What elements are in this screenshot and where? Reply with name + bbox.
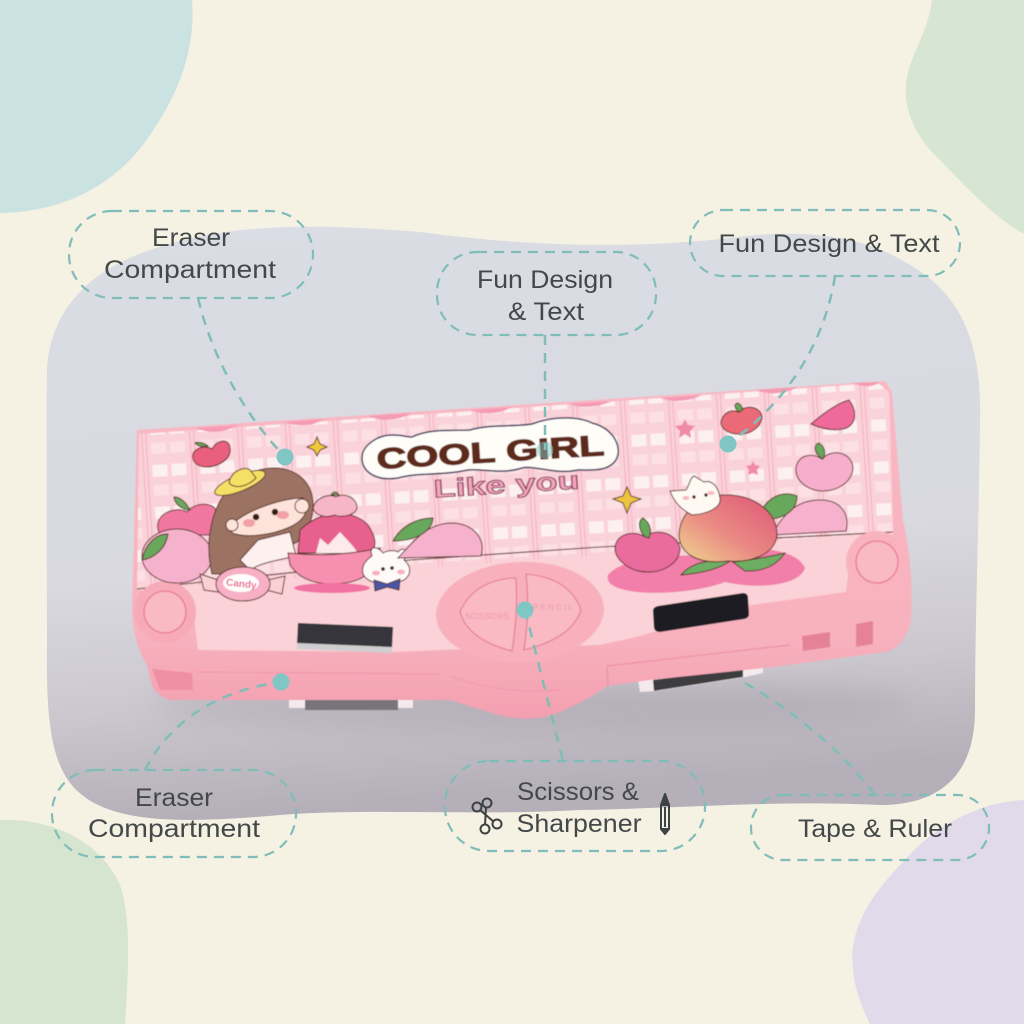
printed lower panel bbox=[137, 532, 893, 652]
right button label: PENCIL bbox=[533, 603, 574, 612]
sticker: big peach bbox=[679, 495, 777, 562]
scallops along top edge bbox=[195, 382, 880, 432]
left hinge slot bbox=[152, 669, 193, 690]
callout: eraser compartment top: Eraser bbox=[152, 224, 230, 252]
title badge bbox=[362, 418, 618, 479]
sticker: peach slice bbox=[811, 400, 855, 430]
left button: scissors bbox=[460, 578, 516, 651]
decorative blob: bottom left green bbox=[0, 820, 128, 1024]
callout: tape and ruler bbox=[751, 795, 989, 860]
sticker: apple right bbox=[796, 443, 853, 491]
tagline text: Like you bbox=[433, 467, 580, 503]
sticker: small apple top left bbox=[193, 441, 230, 467]
sticker: bunny bbox=[363, 548, 410, 591]
decorative blob: top right green bbox=[906, 0, 1024, 234]
lower right clip bbox=[638, 662, 763, 692]
sticker: left pink apple bbox=[158, 497, 216, 535]
sticker: girl bbox=[209, 465, 313, 574]
sticker: apple top right bbox=[721, 403, 762, 434]
sticker: yellow sparkle right bbox=[613, 487, 641, 513]
callout: fun design right bbox=[690, 210, 960, 276]
girl hat bbox=[212, 465, 268, 501]
sticker: sundae shadow bbox=[294, 583, 370, 593]
printed plaid panel bbox=[137, 383, 893, 590]
decorative blob: top left blue bbox=[0, 0, 193, 213]
lower drawer outline bbox=[607, 645, 790, 686]
callout dots bbox=[272, 436, 736, 690]
grey backdrop behind the product bbox=[47, 227, 980, 820]
icon: pencil bbox=[661, 794, 669, 834]
right button: pencil bbox=[524, 574, 581, 650]
pencil box product bbox=[132, 381, 912, 719]
right black clasp bbox=[653, 593, 749, 632]
left button label: SCISSORS bbox=[465, 612, 509, 621]
sticker: leaves under big peach bbox=[681, 553, 785, 575]
callout: scissors and sharpener: Scissors & bbox=[517, 778, 639, 806]
sticker: peach shadow bbox=[608, 549, 805, 593]
candy label: Candy bbox=[225, 577, 257, 592]
callout: eraser compartment bottom: Compartment bbox=[88, 815, 260, 843]
centre dial bbox=[433, 558, 607, 666]
sticker: cat bbox=[670, 476, 720, 515]
callout: fun design centre bbox=[437, 252, 656, 335]
lower left clip bbox=[289, 697, 413, 710]
sticker: sundae bbox=[288, 492, 380, 584]
box body bbox=[132, 381, 912, 719]
callout: eraser compartment bottom: Eraser bbox=[135, 784, 213, 812]
horizon line bbox=[137, 532, 893, 589]
sticker: back peach bbox=[762, 494, 847, 535]
callout: tape and ruler: Tape & Ruler bbox=[798, 815, 952, 843]
right round button bbox=[846, 531, 908, 593]
leader lines bbox=[145, 276, 875, 795]
callout: eraser compartment bottom bbox=[52, 770, 296, 857]
front seam bbox=[195, 672, 560, 691]
sticker: pink stars bbox=[675, 419, 760, 475]
decorative blob: bottom right lavender bbox=[852, 800, 1024, 1024]
sticker: middle peach bbox=[393, 518, 482, 558]
left metal clasp bbox=[297, 623, 393, 653]
left round button bbox=[134, 581, 196, 643]
right side slots bbox=[802, 621, 873, 651]
callout: scissors and sharpener: Sharpener bbox=[516, 810, 642, 838]
product shadow bbox=[150, 679, 910, 731]
sticker: left peach bbox=[142, 529, 212, 583]
callout: fun design right: Fun Design & Text bbox=[718, 230, 940, 258]
sticker: candy bbox=[200, 567, 285, 601]
callout: eraser compartment top bbox=[69, 211, 313, 298]
title text: COOL GIRL bbox=[376, 430, 605, 476]
sticker: yellow sparkle left bbox=[307, 437, 327, 456]
callout: eraser compartment top: Compartment bbox=[104, 256, 276, 284]
callout: fun design centre: & Text bbox=[508, 298, 584, 326]
sticker: pink apple right of centre bbox=[615, 518, 680, 572]
icon: scissors bbox=[472, 798, 502, 834]
callout: fun design centre: Fun Design bbox=[477, 266, 613, 294]
callout: scissors and sharpener bbox=[445, 761, 705, 851]
